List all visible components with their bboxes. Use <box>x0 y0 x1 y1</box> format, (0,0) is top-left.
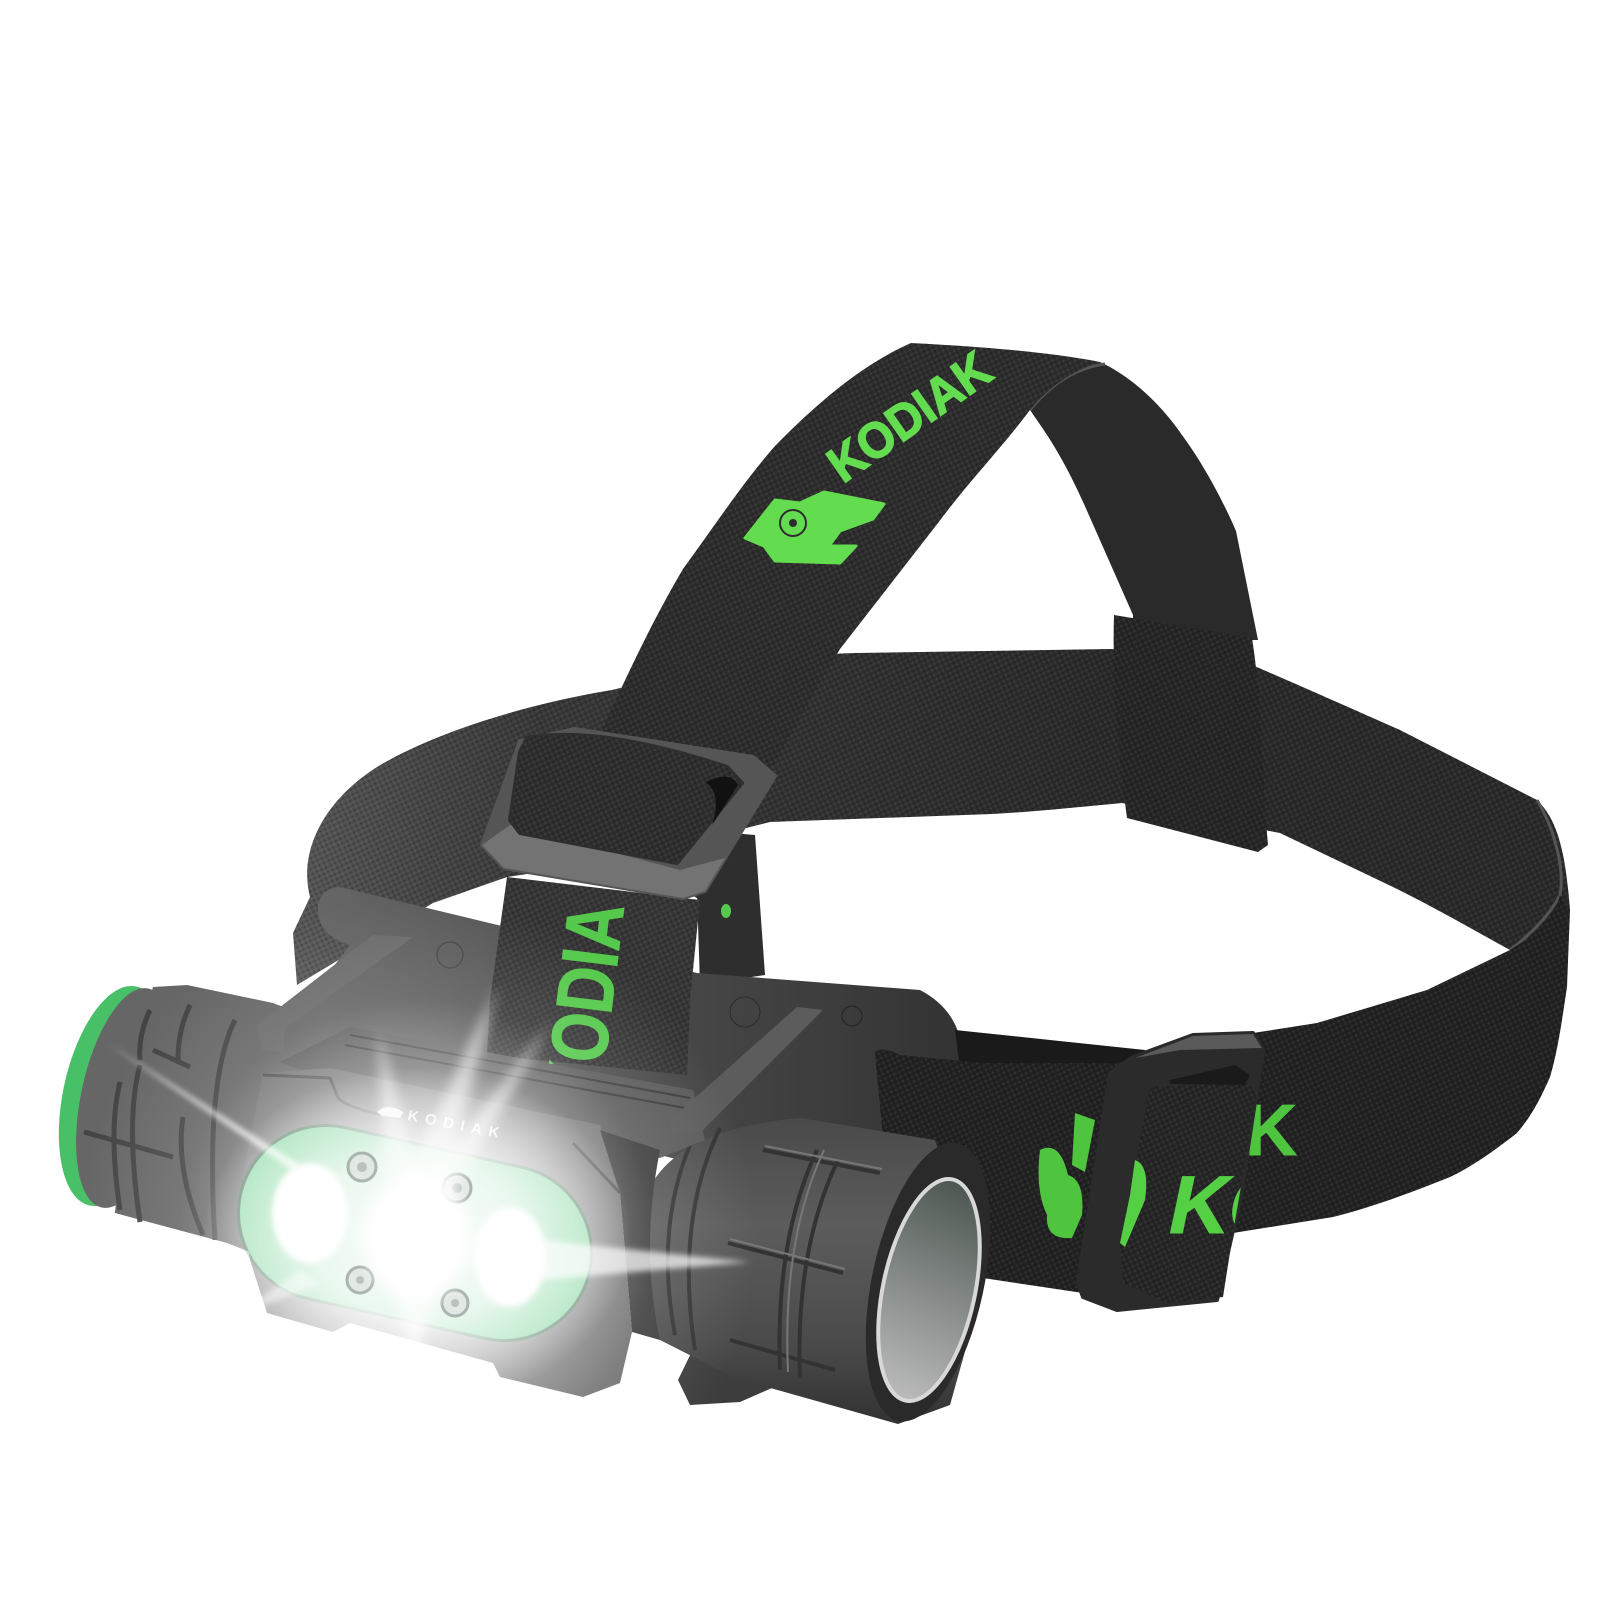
housing wordmark: KODIAK <box>406 1107 501 1142</box>
clip rail over housing <box>280 1027 705 1158</box>
plate screws <box>347 1153 471 1316</box>
flap wordmark: KOD <box>1161 1159 1363 1251</box>
right battery tube <box>640 1118 1012 1433</box>
strap buckle: upper <box>482 729 775 898</box>
end cap <box>844 1131 1012 1433</box>
left clip bar <box>257 935 413 1052</box>
clip bars <box>257 935 823 1133</box>
strap logo: bear <box>745 492 884 563</box>
strap buckle: lower <box>1076 1031 1264 1312</box>
lower strap: front section <box>875 895 1570 1293</box>
product illustration: KODIAK headlamp <box>58 343 1570 1424</box>
strap wordmark fragment: K <box>1245 1091 1297 1171</box>
front green plate <box>326 1213 504 1253</box>
LEDs <box>272 1163 546 1307</box>
strap wordmark: KODIAK <box>817 340 1002 493</box>
flip tab under housing <box>678 1330 790 1405</box>
light rays <box>107 985 750 1375</box>
strap loop <box>1114 615 1268 852</box>
main housing <box>240 1068 660 1397</box>
ridges <box>668 1128 880 1378</box>
right clip bar <box>670 1007 823 1133</box>
buckle flap <box>1120 1083 1257 1303</box>
left battery tube <box>41 976 330 1280</box>
top strap: lower section with reversed wordmark: KODIAK <box>528 852 647 1113</box>
central hot glow <box>202 1067 632 1407</box>
overall light bloom <box>77 897 757 1577</box>
lower strap: rear layer <box>955 1030 1145 1085</box>
top strap: front section with logo <box>520 340 1100 900</box>
strap logo: partial bear <box>1039 1113 1095 1238</box>
top strap: rear section <box>1030 362 1258 640</box>
green end ring <box>41 976 185 1216</box>
top strap: lower section with reversed wordmark <box>487 877 700 1075</box>
rear fold of lower strap <box>695 830 765 985</box>
head strap: back section <box>293 649 1570 985</box>
buckle flap <box>510 735 742 863</box>
magnet lens <box>861 1170 997 1410</box>
mounting plate <box>285 887 962 1165</box>
